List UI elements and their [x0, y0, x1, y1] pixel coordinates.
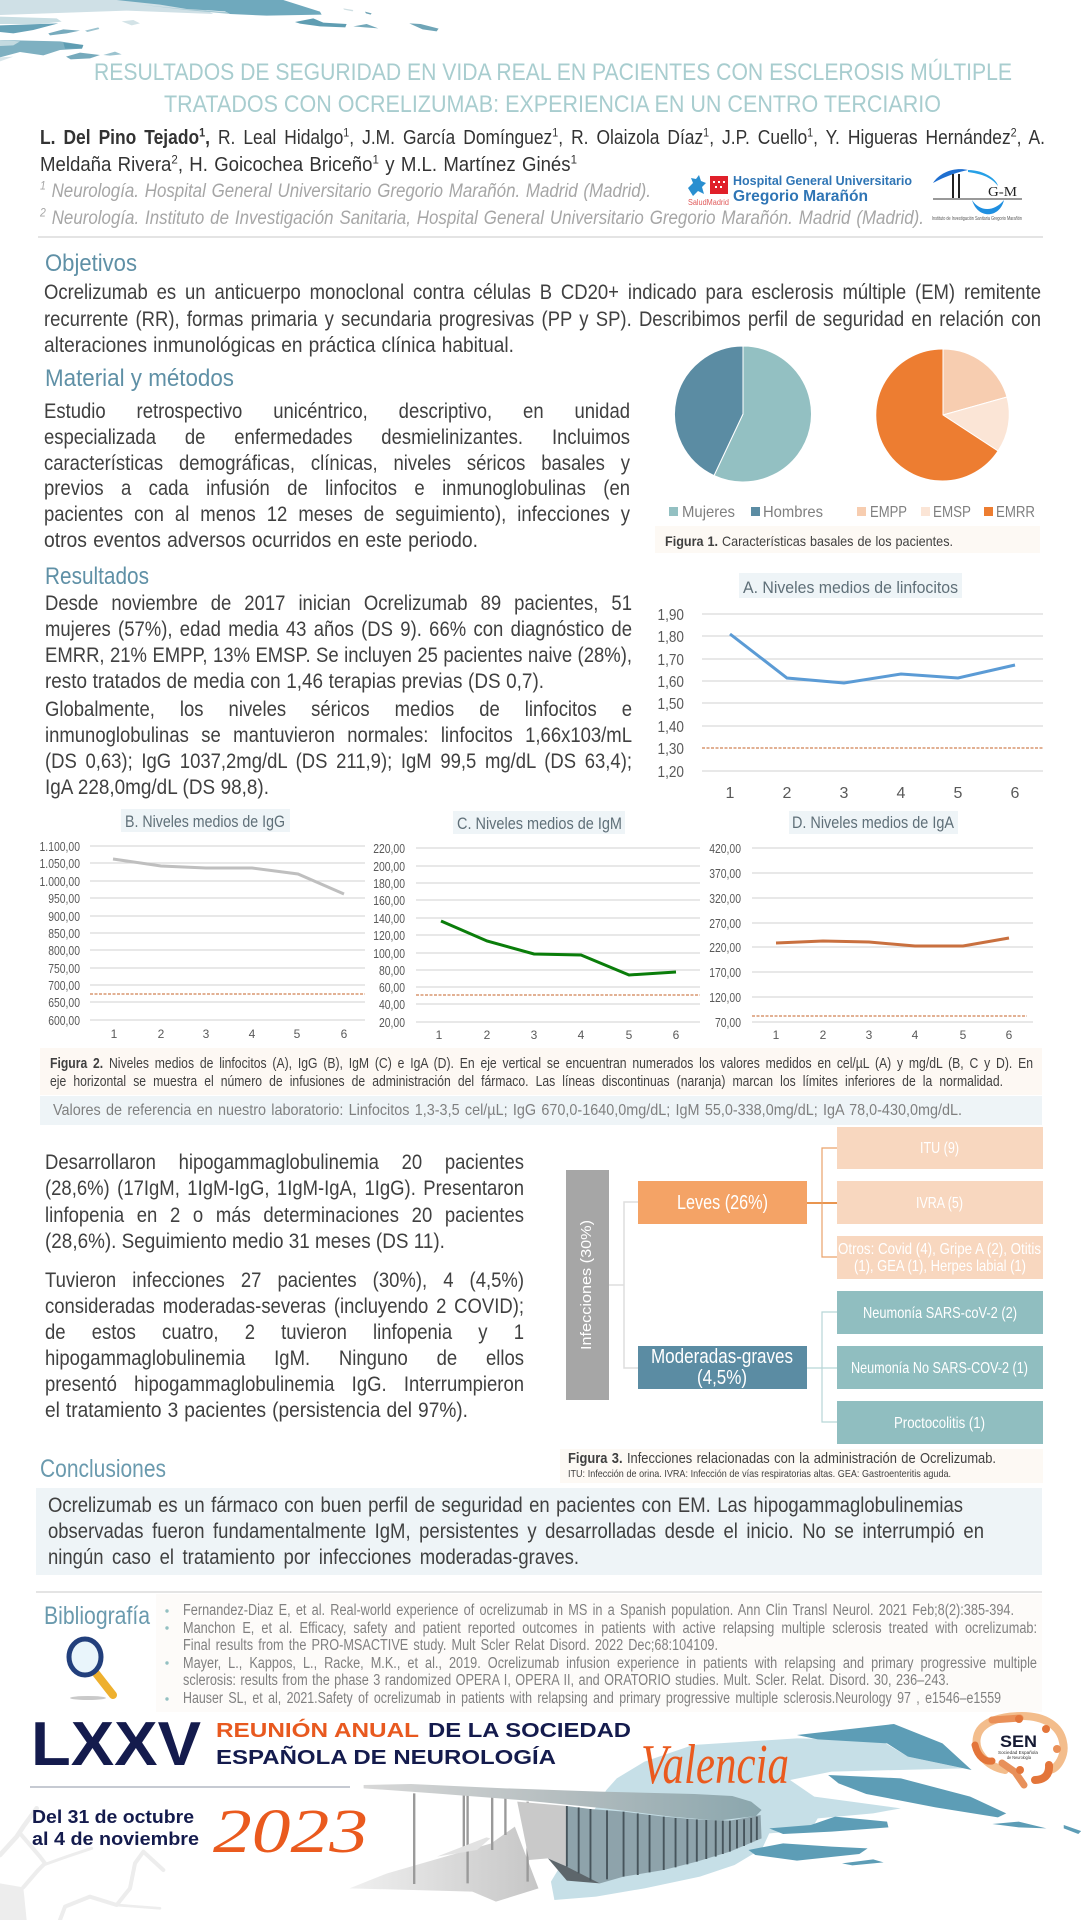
line chart D: IgA: 5: [960, 1028, 967, 1042]
text: resultados: inmunoglobulinas se mantuvieron normales: linfocitos 1,66x103/mL: [45, 724, 632, 747]
icon: magnifying glass: [69, 1639, 113, 1700]
text: afiliaciones: 2 Neurología. Instituto de Investigación Sanitaria, Hospital General Universitario Gregorio Marañón. Madrid (Madrid).: [40, 207, 924, 229]
line chart C: IgM: C. Niveles medios de IgM: [457, 814, 622, 833]
line chart A: linfocitos: 1,40: [658, 719, 684, 736]
connectors leves: [807, 1202, 837, 1204]
line chart B: IgG: B. Niveles medios de IgG: [125, 812, 285, 831]
text: autores: L. Del Pino Tejado1, R. Leal Hidalgo1, J.M. García Domínguez1, R. Olaizola Díaz1, J.P. Cuello1, Y. Higueras Hernández2, A.: [40, 125, 1045, 149]
bar: infecciones 30%: Infecciones (30%): [578, 1220, 595, 1350]
title: TRATADOS CON OCRELIZUMAB: EXPERIENCIA EN UN CENTRO TERCIARIO: [164, 91, 941, 118]
heading: LXXV: LXXV: [31, 1710, 201, 1779]
line chart C: IgM: [373, 811, 700, 1042]
text: bibliografía: Manchon E, et al. Efficacy, safety and patient reported outcomes in patients with active relapsing multiple sclerosis treated with ocrelizumab:: [183, 1620, 1037, 1637]
text: material y métodos: Estudio retrospectivo unicéntrico, descriptivo, en unidad: [44, 400, 630, 423]
logo: SEN: SEN: [1000, 1732, 1037, 1751]
text: resultados: Desde noviembre de 2017 inician Ocrelizumab 89 pacientes, 51: [45, 592, 632, 615]
line chart D: IgA: D. Niveles medios de IgA: [792, 813, 955, 832]
box: otros: (1), GEA (1), Herpes labial (1): [854, 1258, 1026, 1275]
text: conclusiones: ningún caso el tratamiento por infecciones moderadas-graves.: [48, 1546, 579, 1569]
line chart B: IgG: 6: [341, 1027, 348, 1041]
line chart B: IgG: 3: [203, 1027, 210, 1041]
line chart A: linfocitos: 1,70: [658, 652, 684, 669]
pie legend: EMRR: [996, 504, 1035, 521]
line chart C: IgM: 20,00: [379, 1016, 405, 1030]
logo: Hospital Gregorio Marañón: SaludMadrid: [688, 198, 729, 207]
text: bibliografía: [183, 1602, 1037, 1707]
line chart A: linfocitos: 1,80: [658, 629, 684, 646]
line chart B: IgG: 1: [111, 1027, 118, 1041]
text: infecciones: el tratamiento 3 pacientes (persistencia del 97%).: [45, 1399, 468, 1422]
line chart A: linfocitos: 5: [954, 785, 963, 802]
line chart C: IgM: 5: [626, 1028, 633, 1042]
caption panel: figura 1: [655, 526, 1040, 553]
caption: figura 2: Figura 2. Niveles medios de linfocitos (A), IgG (B), IgM (C) e IgA (D). En eje vertical se encuentran numerados los valores medidos en cel/µL (A) y mg/dL (B, C y D). En: [50, 1056, 1033, 1072]
box: neumonía SARS-coV-2: [837, 1291, 1043, 1334]
bibliography bullets: [165, 1609, 169, 1701]
text: conclusiones: Ocrelizumab es un fármaco con buen perfil de seguridad en pacientes con EM. Las hipogammaglobulinemias: [48, 1494, 963, 1517]
line chart D: IgA: 2: [820, 1028, 827, 1042]
line chart D: IgA: 1: [773, 1028, 780, 1042]
line chart C: IgM: 40,00: [379, 998, 405, 1012]
line chart B: IgG: 850,00: [48, 927, 80, 941]
text: infecciones: presentó hipogammaglobulinemia IgG. Interrumpieron: [45, 1373, 524, 1396]
line chart C: IgM: 2: [484, 1028, 491, 1042]
text: afiliaciones: 1 Neurología. Hospital General Universitario Gregorio Marañón. Madrid (Madrid).: [40, 180, 651, 202]
text: valores de referencia: Valores de referencia en nuestro laboratorio: Linfocitos 1,3-3,5 cel/µL; IgG 670,0-1640,0mg/dL; IgM 55,0-338,0mg/dL; IgA 78,0-430,0mg/dL.: [53, 1102, 962, 1119]
line chart D: IgA: 3: [866, 1028, 873, 1042]
line chart B: IgG: 650,00: [48, 996, 80, 1010]
text: bibliografía: Fernandez-Diaz E, et al. Real-world experience of ocrelizumab in MS in a Spanish population. Ann Clin Transl Neurol. 2021 Feb;8(2):385-394.: [183, 1602, 1014, 1619]
line chart D: IgA: 270,00: [709, 917, 741, 931]
text: infecciones: [45, 1269, 524, 1422]
box: proctocolitis: [837, 1401, 1043, 1444]
text: material y métodos: especializada de enfermedades desmielinizantes. Incluimos: [44, 426, 630, 449]
box: otros: Otros: Covid (4), Gripe A (2), Otitis: [838, 1241, 1041, 1258]
text: hipogammaglobulinemia: (28,6%) (17IgM, 1IgM-IgG, 1IgM-IgA, 1IgG). Presentaron: [45, 1177, 524, 1200]
line chart D: IgA: 320,00: [709, 892, 741, 906]
logo: SEN: [975, 1715, 1064, 1785]
logo: SEN: Sociedad Española: [998, 1750, 1039, 1755]
box: proctocolitis: Proctocolitis (1): [894, 1415, 985, 1432]
box: IVRA: [837, 1181, 1043, 1224]
text: infecciones: de estos cuatro, 2 tuvieron linfopenia y 1: [45, 1321, 524, 1344]
logo: Hospital Gregorio Marañón: Gregorio Marañón: [733, 188, 868, 205]
line chart D: IgA: 4: [912, 1028, 919, 1042]
line chart A: linfocitos: 1: [726, 785, 735, 802]
line chart B: IgG: 900,00: [48, 910, 80, 924]
box: neumonía no SARS-COV-2: Neumonía No SARS-COV-2 (1): [851, 1360, 1028, 1377]
text: fechas: [32, 1807, 199, 1849]
line chart A: linfocitos: 1,50: [658, 696, 684, 713]
line chart C: IgM: 100,00: [373, 947, 405, 961]
heading: reunión anual: ESPAÑOLA DE NEUROLOGÍA: [216, 1746, 556, 1769]
line chart A: linfocitos: 2: [783, 785, 792, 802]
line chart C: IgM: 3: [531, 1028, 538, 1042]
line chart D: IgA: 420,00: [709, 842, 741, 856]
box: neumonía no SARS-COV-2: [837, 1346, 1043, 1389]
line chart B: IgG: 4: [249, 1027, 256, 1041]
box: leves: [638, 1181, 807, 1224]
caption panel: figura 3: [560, 1449, 1043, 1483]
line chart C: IgM: 1: [436, 1028, 443, 1042]
text: resultados: resto tratados de media con 1,46 terapias previas (DS 0,7).: [45, 670, 544, 693]
text: fechas: al 4 de noviembre: [32, 1829, 199, 1849]
line chart D: IgA: [709, 811, 1033, 1042]
line chart B: IgG: 950,00: [48, 892, 80, 906]
line chart A: linfocitos: [658, 573, 1043, 802]
facade: [517, 1802, 567, 1867]
bottom left gray veins: [0, 1808, 163, 1920]
heading: reunión anual: DE LA SOCIEDAD: [428, 1720, 631, 1742]
text: hipogammaglobulinemia: (28,6%). Seguimiento medio 31 meses (DS 11).: [45, 1230, 445, 1253]
box: moderadas-graves: [638, 1346, 807, 1389]
text: objetivos: alteraciones inmunológicas en práctica clínica habitual.: [44, 334, 514, 357]
text: conclusiones: [48, 1494, 984, 1569]
line chart D: IgA: 370,00: [709, 867, 741, 881]
title: [94, 59, 1012, 118]
text: objetivos: Ocrelizumab es un anticuerpo monoclonal contra células B CD20+ indicado para esclerosis múltiple (EM) remitente: [44, 281, 1041, 304]
pie chart: formas de EM: [876, 349, 1009, 481]
line chart C: IgM: 80,00: [379, 964, 405, 978]
text: resultados: IgA 228,0mg/dL (DS 98,8).: [45, 776, 269, 799]
text: fechas: Del 31 de octubre: [32, 1807, 194, 1827]
pie legend: EMSP: [933, 504, 971, 521]
logo: Instituto de Investigación Gregorio Marañón: G-M: [988, 185, 1018, 200]
text: hipogammaglobulinemia: [45, 1151, 524, 1253]
roof: [364, 1784, 762, 1821]
line chart C: IgM: 220,00: [373, 842, 405, 856]
pie chart: sexo: [675, 346, 812, 482]
pie legend: Hombres: [763, 504, 823, 521]
text: bibliografía: Final results from the PRO-MSACTIVE study. Mult Scler Relat Disord. 2022 Dec;68:104109.: [183, 1637, 718, 1654]
caption: figura 2: eje horizontal se muestra el número de infusiones de administración del fármaco. Las líneas discontinuas (naranja) marcan los límites inferiores de la normalidad.: [50, 1074, 1003, 1090]
line chart B: IgG: 700,00: [48, 979, 80, 993]
diagram: infecciones: [566, 1127, 1043, 1444]
line chart D: IgA: 120,00: [709, 991, 741, 1005]
heading: Material y métodos: Material y métodos: [45, 365, 234, 392]
heading: reunión anual: REUNIÓN ANUAL: [216, 1718, 419, 1742]
line chart B: IgG: 800,00: [48, 944, 80, 958]
line chart C: IgM: 180,00: [373, 877, 405, 891]
text: afiliaciones: [40, 180, 924, 229]
line chart C: IgM: 4: [578, 1028, 585, 1042]
text: infecciones: Tuvieron infecciones 27 pacientes (30%), 4 (4,5%): [45, 1269, 524, 1292]
text: infecciones: hipogammaglobulinemia IgM. Ninguno de ellos: [45, 1347, 524, 1370]
text: hipogammaglobulinemia: Desarrollaron hipogammaglobulinemia 20 pacientes: [45, 1151, 524, 1174]
caption: figura 3: [568, 1450, 996, 1480]
line chart B: IgG: 5: [294, 1027, 301, 1041]
line chart D: IgA: 6: [1006, 1028, 1013, 1042]
line chart C: IgM: 60,00: [379, 981, 405, 995]
connectors moderadas: [807, 1312, 837, 1422]
line chart A: linfocitos: 1,20: [658, 764, 684, 781]
box: IVRA: IVRA (5): [916, 1195, 963, 1212]
logo: SEN: de Neurología: [1007, 1755, 1031, 1760]
text: material y métodos: pacientes con al menos 12 meses de seguimiento), infecciones y: [44, 503, 630, 526]
heading: reunión anual: [216, 1718, 631, 1769]
heading: Bibliografía: Bibliografía: [44, 1602, 150, 1630]
line chart D: IgA: 170,00: [709, 966, 741, 980]
line chart B: IgG: 600,00: [48, 1014, 80, 1028]
text: resultados: Globalmente, los niveles séricos medios de linfocitos e: [45, 698, 632, 721]
text: material y métodos: otros eventos adversos ocurridos en este periodo.: [44, 529, 478, 552]
pie legend: Mujeres: [682, 504, 735, 521]
text: conclusiones: observadas fueron fundamentalmente IgM, persistentes y desarrolladas desde el inicio. No se interrumpió en: [48, 1520, 984, 1543]
panel: valores de referencia: [40, 1096, 1042, 1125]
text: material y métodos: previos a cada infusión de linfocitos e inmunoglobulinas (en: [44, 477, 630, 500]
line chart B: IgG: 1.050,00: [40, 857, 80, 871]
text: autores: Meldaña Rivera2, H. Goicochea Briceño1 y M.L. Martínez Ginés1: [40, 152, 577, 176]
line chart B: IgG: 1.100,00: [40, 840, 80, 854]
box: moderadas-graves: (4,5%): [697, 1367, 747, 1389]
text: bibliografía: Mayer, L., Kappos, L., Racke, M.K., et al., 2019. Ocrelizumab infusion experience in patients with relapsing and primary progressive multiple: [183, 1655, 1037, 1672]
caption: figura 1: Figura 1. Características basales de los pacientes.: [665, 533, 953, 549]
box: leves: Leves (26%): [677, 1192, 768, 1214]
text: infecciones: consideradas moderadas-severas (incluyendo 2 COVID);: [45, 1295, 524, 1318]
logo: Instituto de Investigación Gregorio Marañón: [932, 169, 1022, 222]
line chart C: IgM: 6: [673, 1028, 680, 1042]
logo: Instituto de Investigación Gregorio Marañón: Instituto de Investigación Sanitaria Gregorio Marañón: [932, 216, 1022, 222]
box: neumonía SARS-coV-2: Neumonía SARS-coV-2 (2): [863, 1305, 1017, 1322]
logo: Hospital Gregorio Marañón: [688, 173, 912, 207]
columns: [414, 1793, 528, 1884]
caption: figura 3: ITU: Infección de orina. IVRA: Infección de vías respiratorias altas. GEA: Gastroenteritis aguda.: [568, 1468, 951, 1480]
line chart A: linfocitos: 4: [897, 785, 906, 802]
box: moderadas-graves: Moderadas-graves: [651, 1346, 793, 1368]
box: otros: [837, 1236, 1043, 1279]
caption: figura 2: [50, 1056, 1033, 1090]
line chart A: linfocitos: 1,30: [658, 741, 684, 758]
line chart A: linfocitos: 3: [840, 785, 849, 802]
line chart C: IgM: 160,00: [373, 894, 405, 908]
line chart D: IgA: 70,00: [715, 1016, 741, 1030]
text: material y métodos: [44, 400, 630, 552]
pie legend: EMPP: [870, 504, 907, 521]
text: hipogammaglobulinemia: linfopenia en 2 o más determinaciones 20 pacientes: [45, 1204, 524, 1227]
ground shadow: [349, 1827, 538, 1902]
text: resultados: mujeres (57%), edad media 43 años (DS 9). 66% con diagnóstico de: [45, 618, 632, 641]
text: material y métodos: características demográficas, clínicas, niveles séricos basales y: [44, 452, 630, 475]
wash strokes: [748, 1724, 1081, 1865]
line chart C: IgM: 120,00: [373, 929, 405, 943]
line chart A: linfocitos: A. Niveles medios de linfocitos: [743, 578, 958, 597]
line chart A: linfocitos: 6: [1011, 785, 1020, 802]
line chart A: linfocitos: 1,60: [658, 674, 684, 691]
top watercolor splash: [0, 0, 439, 61]
heading: Conclusiones: Conclusiones: [40, 1455, 166, 1483]
text: resultados: [45, 592, 632, 799]
line chart C: IgM: 140,00: [373, 912, 405, 926]
text: objetivos: recurrente (RR), formas primaria y secundaria progresivas (PP y SP). Describimos perfil de seguridad en relación con: [44, 308, 1041, 330]
text: resultados: EMRR, 21% EMPP, 13% EMSP. Se incluyen 25 pacientes naive (28%),: [45, 644, 632, 667]
line chart B: IgG: 2: [158, 1027, 165, 1041]
text: objetivos: [44, 281, 1041, 357]
panel: conclusiones: [36, 1488, 1042, 1575]
line chart B: IgG: 1.000,00: [40, 875, 80, 889]
line chart B: IgG: 750,00: [48, 962, 80, 976]
box: ITU: [837, 1127, 1043, 1169]
line chart C: IgM: 200,00: [373, 860, 405, 874]
heading: Resultados: Resultados: [45, 563, 149, 590]
logo: Hospital Gregorio Marañón: Hospital General Universitario: [733, 173, 912, 188]
line chart B: IgG: [40, 809, 365, 1041]
caption panel: figura 2: [40, 1048, 1042, 1095]
connectors root: [609, 1202, 638, 1368]
line chart D: IgA: 220,00: [709, 941, 741, 955]
bar: infecciones 30%: [566, 1170, 609, 1400]
box: ITU: ITU (9): [920, 1140, 959, 1157]
text: Valencia: Valencia: [641, 1734, 789, 1796]
text: bibliografía: Hauser SL, et al, 2021.Safety of ocrelizumab in patients with relapsing and primary progressive multiple sclerosis.Neurology 97 , e1546–e1559: [183, 1690, 1001, 1707]
text: resultados: (DS 0,63); IgG 1037,2mg/dL (DS 211,9); IgM 99,5 mg/dL (DS 63,4);: [45, 750, 632, 773]
panel: bibliografía: [156, 1594, 1042, 1712]
text: bibliografía: sclerosis: results from the phase 3 randomized OPERA I, OPERA II, and ORATORIO studies. Mult. Scler. Relat. Disord. 30, 236–243.: [183, 1672, 949, 1689]
light blue wash: [551, 1724, 1081, 1900]
heading: Objetivos: Objetivos: [45, 250, 137, 277]
line chart A: linfocitos: 1,90: [658, 607, 684, 624]
caption: figura 3: Figura 3. Infecciones relacionadas con la administración de Ocrelizumab.: [568, 1450, 996, 1467]
building: Valencia: [349, 1784, 762, 1902]
pie legend: [669, 504, 1035, 521]
text: 2023: 2023: [213, 1798, 368, 1866]
text: autores: [40, 125, 1045, 176]
